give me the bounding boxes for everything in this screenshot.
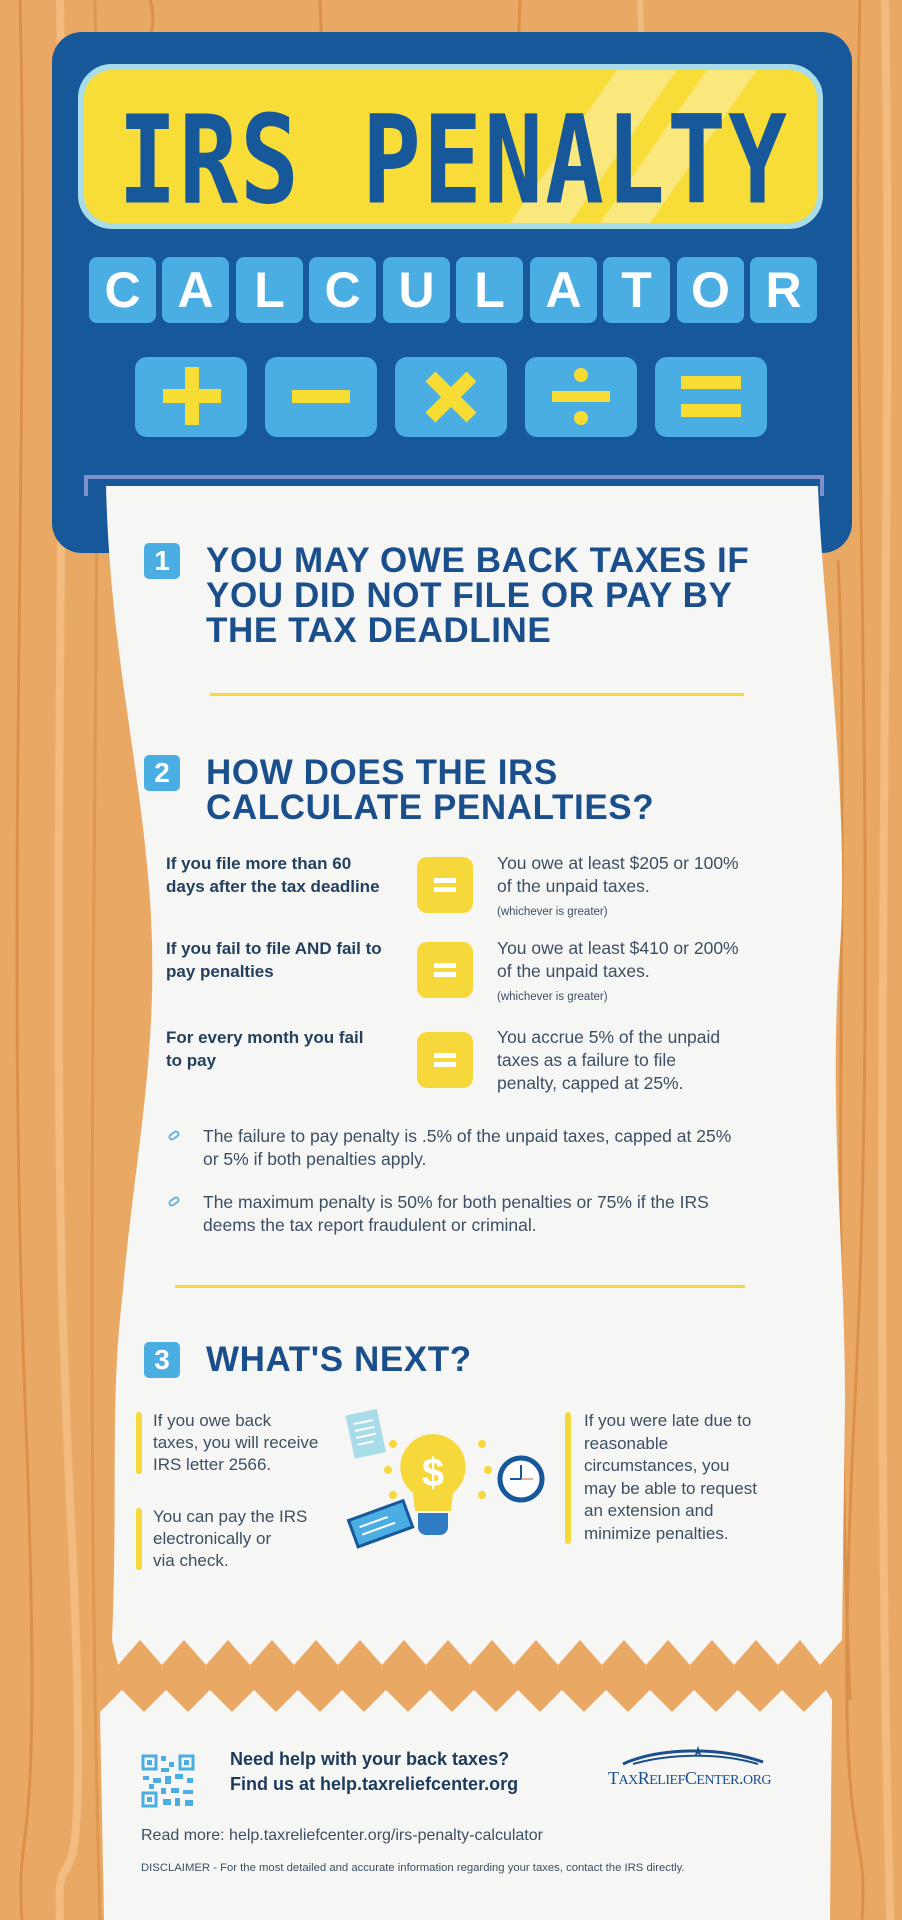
calculator letter keys: L — [474, 262, 505, 318]
next: extension: may be able to request — [584, 1478, 757, 1498]
row 2: of the unpaid taxes. — [497, 961, 650, 981]
calculator letter keys — [89, 257, 817, 323]
calculator letter keys: T — [621, 262, 652, 318]
icon: equals — [417, 857, 473, 913]
row 1: of the unpaid taxes. — [497, 876, 650, 896]
illustration: lightbulb with dollar, clock, document, card — [346, 1409, 544, 1549]
next: extension: If you were late due to — [584, 1411, 751, 1430]
next: letter: taxes, you will receive — [153, 1433, 318, 1452]
next: pay: via check. — [153, 1551, 229, 1570]
row 3: to pay — [166, 1051, 216, 1070]
next: letter: IRS letter 2566. — [153, 1455, 271, 1474]
title display: IRS PENALTY: IRS PENALTY — [118, 90, 789, 229]
row 3: You accrue 5% of the unpaid — [497, 1027, 720, 1047]
illustration: lightbulb with dollar, clock, document, card: $ — [422, 1451, 444, 1495]
row 2 — [166, 938, 739, 1003]
calculator letter keys: A — [177, 262, 214, 318]
calculator letter keys: L — [254, 262, 285, 318]
logo — [608, 1743, 772, 1788]
icon: equals — [417, 1032, 473, 1088]
row 3: For every month you fail — [166, 1028, 363, 1047]
logo: ★ — [692, 1743, 704, 1759]
bullet 1 — [168, 1126, 731, 1169]
next: pay — [136, 1507, 307, 1570]
calculator letter keys: A — [545, 262, 582, 318]
row 3: taxes as a failure to file — [497, 1050, 676, 1070]
icon: equals — [417, 942, 473, 998]
section 3 heading: WHAT'S NEXT? — [206, 1340, 472, 1379]
heading 1 — [206, 541, 749, 650]
QR code — [142, 1754, 194, 1808]
row 1: If you file more than 60 — [166, 854, 351, 873]
next: extension: minimize penalties. — [584, 1524, 729, 1542]
next: extension — [565, 1411, 757, 1544]
calculator letter keys: R — [765, 262, 802, 318]
footer help text: Find us at help.taxreliefcenter.org — [230, 1774, 518, 1794]
row 2: pay penalties — [166, 962, 274, 981]
calculator letter keys: C — [324, 262, 361, 318]
read more: Read more: help.taxreliefcenter.org/irs-penalty-calculator — [141, 1827, 543, 1844]
logo: TAXRELIEFCENTER.ORG — [608, 1768, 771, 1788]
row 3 — [166, 1027, 720, 1093]
heading 1: THE TAX DEADLINE — [206, 611, 551, 650]
section 2 heading — [144, 753, 654, 827]
bullet 1: The failure to pay penalty is .5% of the unpaid taxes, capped at 25% — [203, 1126, 731, 1146]
row 1: (whichever is greater) — [497, 906, 608, 918]
section 2 heading: HOW DOES THE IRS — [206, 753, 558, 792]
heading 1: YOU MAY OWE BACK TAXES IF — [206, 541, 749, 580]
bullet 2: The maximum penalty is 50% for both penalties or 75% if the IRS — [203, 1192, 709, 1212]
next: extension: circumstances, you — [584, 1456, 730, 1475]
footer help text — [230, 1749, 518, 1794]
next: pay: You can pay the IRS — [153, 1507, 307, 1526]
row 1: You owe at least $205 or 100% — [497, 853, 739, 873]
calculator letter keys: U — [398, 262, 435, 318]
bullet 2: deems the tax report fraudulent or criminal. — [203, 1215, 537, 1235]
footer help text: Need help with your back taxes? — [230, 1749, 509, 1769]
row 2: (whichever is greater) — [497, 991, 608, 1003]
section 3 heading: 3 — [154, 1344, 170, 1375]
next: extension: reasonable — [584, 1434, 668, 1452]
heading 1: YOU DID NOT FILE OR PAY BY — [206, 576, 732, 615]
row 2: If you fail to file AND fail to — [166, 939, 382, 958]
paper slot — [84, 475, 824, 496]
section 2 heading: CALCULATE PENALTIES? — [206, 788, 654, 827]
next: letter — [136, 1411, 318, 1474]
calculator letter keys: O — [691, 262, 730, 318]
row 1: days after the tax deadline — [166, 877, 380, 896]
badge 1 — [144, 543, 180, 579]
row 1 — [166, 853, 739, 918]
next: extension: an extension and — [584, 1501, 714, 1520]
section 1 — [144, 541, 749, 650]
calculator body — [52, 32, 852, 553]
bullet 2 — [168, 1192, 709, 1235]
bullet 1: or 5% if both penalties apply. — [203, 1149, 426, 1169]
row 2: You owe at least $410 or 200% — [497, 938, 739, 958]
section 2 heading: 2 — [154, 757, 170, 788]
operator keys — [135, 357, 767, 437]
next: pay: electronically or — [153, 1529, 271, 1548]
row 3: penalty, capped at 25%. — [497, 1073, 683, 1093]
next: letter: If you owe back — [153, 1411, 271, 1430]
badge 1: 1 — [154, 545, 170, 576]
disclaimer: DISCLAIMER - For the most detailed and accurate information regarding your taxes, contact the IRS directly. — [141, 1862, 685, 1874]
calculator letter keys: C — [104, 262, 141, 318]
